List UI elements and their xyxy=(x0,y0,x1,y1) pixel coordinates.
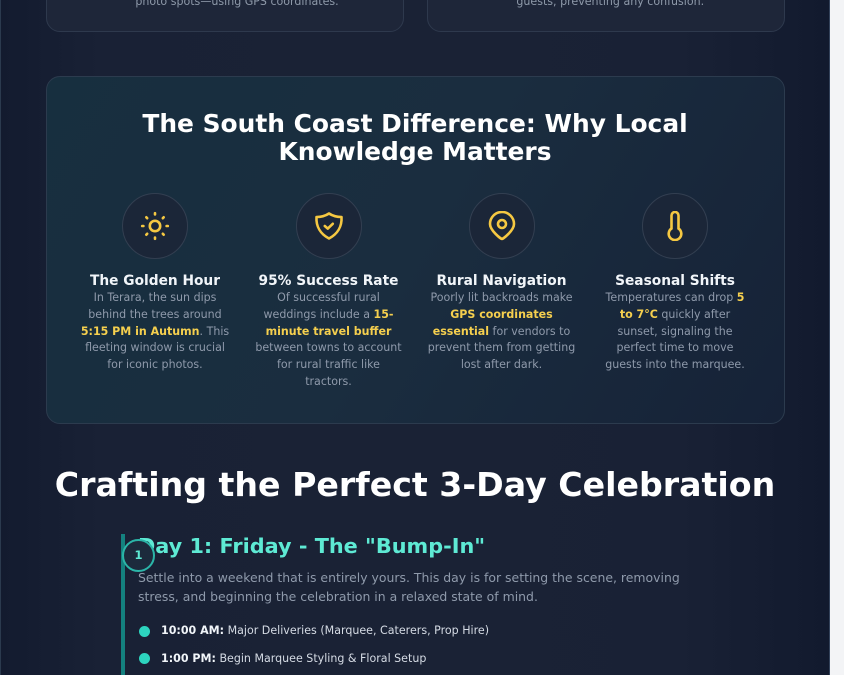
bullet dot 1 xyxy=(139,626,150,636)
card: guests (bottom of top-right card) xyxy=(427,0,784,32)
title: Seasonal Shifts xyxy=(615,273,735,289)
column: The Golden Hour xyxy=(81,193,229,371)
text: to 7°C quickly after xyxy=(620,308,730,321)
text: sunset, signaling the xyxy=(617,325,733,338)
text: perfect time to move xyxy=(617,341,733,354)
icon: thermometer xyxy=(642,193,708,259)
text: In Terara, the sun dips xyxy=(94,291,216,304)
text: for iconic photos. xyxy=(107,358,203,371)
title: The Golden Hour xyxy=(90,273,220,289)
day 1 description: stress, and beginning the celebration in a relaxed state of mind. xyxy=(138,589,538,604)
text xyxy=(428,291,575,371)
day 1 heading: Day 1: Friday - The "Bump-In" xyxy=(138,534,485,558)
text: Of successful rural xyxy=(277,291,380,304)
heading: South Coast Difference: Knowledge Matters xyxy=(278,137,552,166)
text: behind the trees around xyxy=(88,308,222,321)
timeline bar xyxy=(121,534,125,675)
text: minute travel buffer xyxy=(266,325,391,338)
icon: shield check xyxy=(296,193,362,259)
heading: Crafting the Perfect 3-Day Celebration: Crafting the Perfect 3-Day Celebration xyxy=(55,465,775,504)
text: 5:15 PM in Autumn. This xyxy=(81,325,229,338)
day 1 description xyxy=(138,570,680,604)
text: weddings include a 15- xyxy=(264,308,394,321)
heading: South Coast Difference xyxy=(142,109,688,166)
text xyxy=(81,291,229,371)
timeline marker 1: 1 xyxy=(134,548,142,562)
text xyxy=(605,291,745,371)
column: Rural Navigation xyxy=(428,193,575,371)
card: photo spots (bottom of top-left card) xyxy=(46,0,404,32)
text: tractors. xyxy=(305,375,352,388)
heading: South Coast Difference: The South Coast Difference: Why Local xyxy=(142,109,688,138)
panel: South Coast Difference xyxy=(46,76,784,424)
text: Temperatures can drop 5 xyxy=(606,291,744,304)
text: between towns to account xyxy=(255,341,402,354)
schedule item 1: 10:00 AM: Major Deliveries (Marquee, Caterers, Prop Hire) xyxy=(161,624,489,637)
text: fleeting window is crucial xyxy=(85,341,225,354)
column: Seasonal Shifts xyxy=(605,193,745,371)
bullet dot 2 xyxy=(139,652,150,664)
text: lost after dark. xyxy=(461,358,542,371)
timeline marker 1 xyxy=(122,539,155,572)
text: prevent them from getting xyxy=(428,341,575,354)
day 1 description: Settle into a weekend that is entirely yours. This day is for setting the scene, removing xyxy=(138,570,680,585)
icon: sun xyxy=(122,193,188,259)
title: 95% Success Rate xyxy=(259,273,398,289)
schedule item 2: 1:00 PM: Begin Marquee Styling & Floral Setup xyxy=(161,652,426,665)
title: Rural Navigation xyxy=(436,273,567,289)
text: essential for vendors to xyxy=(433,325,570,338)
text: Poorly lit backroads make xyxy=(430,291,573,304)
text: for rural traffic like xyxy=(277,358,380,371)
text: GPS coordinates xyxy=(450,308,553,321)
text: guests into the marquee. xyxy=(605,358,745,371)
text xyxy=(255,291,402,388)
column: 95% Success Rate xyxy=(255,193,402,388)
icon: map pin xyxy=(468,193,534,259)
